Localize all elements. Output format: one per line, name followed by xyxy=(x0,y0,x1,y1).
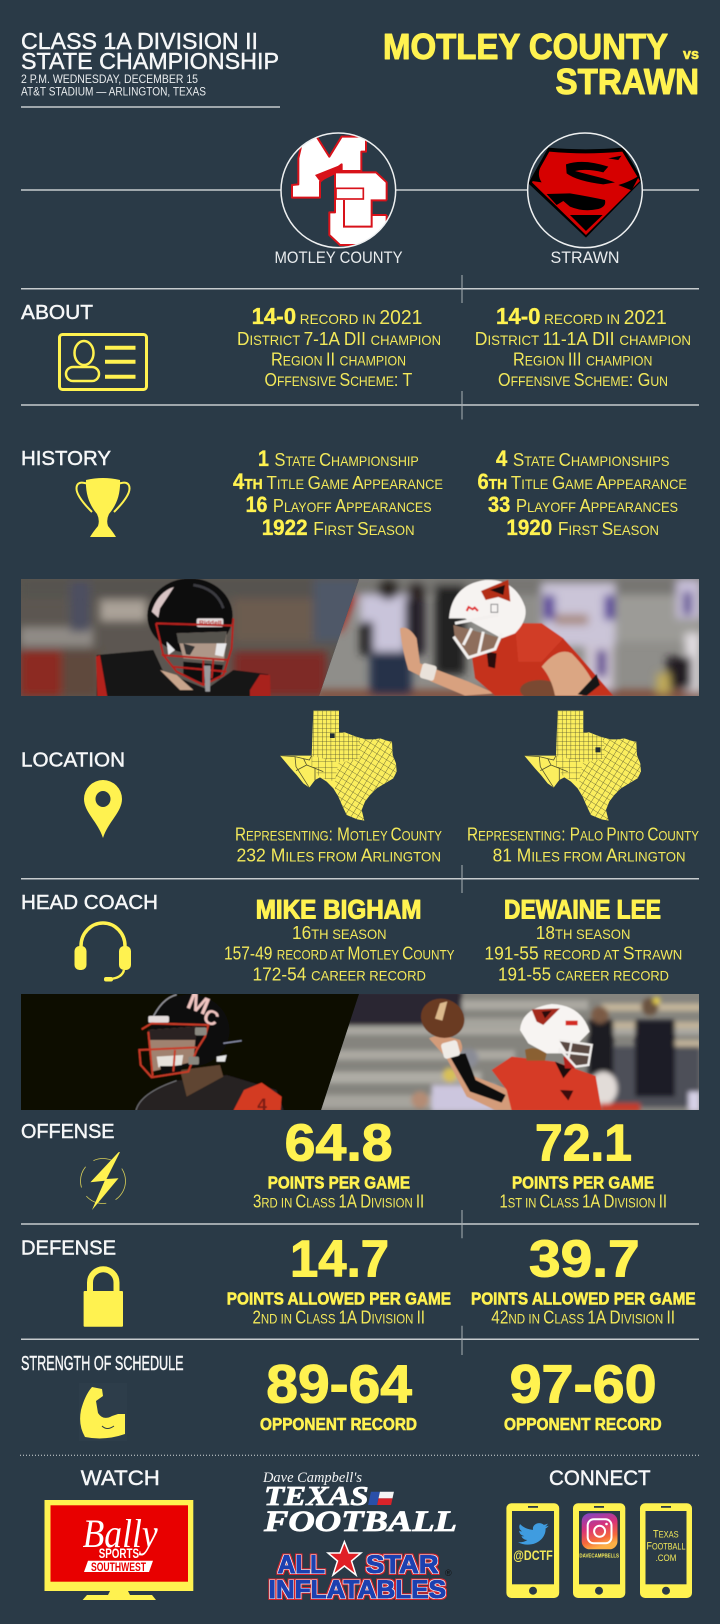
coach: Mike Bigham: 172-54 CAREER RECORD xyxy=(252,963,426,984)
logo: Dave Campbell's Texas Football xyxy=(262,1470,457,1538)
about: Motley County: OFFENSIVE SCHEME: T xyxy=(264,369,412,390)
stat: Motley County defense: 14.7 xyxy=(290,1231,389,1289)
location: Strawn: 81 MILES FROM ARLINGTON xyxy=(493,845,686,866)
stat: Strawn offense: 1ST IN CLASS 1A DIVISION II xyxy=(500,1191,667,1212)
logo: Strawn Superman shield xyxy=(528,133,643,248)
icon: headset xyxy=(74,923,131,982)
section: about xyxy=(21,302,691,390)
stat: Motley County defense: POINTS ALLOWED PER GAME xyxy=(227,1289,451,1309)
logo: Dave Campbell's Texas Football: TEXAS xyxy=(264,1481,369,1511)
icon: television with Bally Sports logo: SPORTS xyxy=(99,1546,139,1561)
coach: Dewaine Lee: 18TH SEASON xyxy=(536,922,630,943)
stat: Strawn offense xyxy=(500,1115,667,1212)
team label: Strawn: STRAWN xyxy=(550,248,620,267)
header: matchup title: STRAWN xyxy=(556,61,699,102)
about: Motley County xyxy=(237,303,441,390)
stat: Motley County defense: 2ND IN CLASS 1A DIVISION II xyxy=(252,1307,425,1328)
stat: Strawn defense: POINTS ALLOWED PER GAME xyxy=(471,1289,696,1309)
heading: defense: DEFENSE xyxy=(21,1237,116,1259)
icon: map pin xyxy=(84,780,122,838)
team label: Motley County: MOTLEY COUNTY xyxy=(274,248,402,267)
logo: Dave Campbell's Texas Football: Dave Campbell's xyxy=(262,1470,362,1486)
header: game details: 2 P.M. WEDNESDAY, DECEMBER 15 xyxy=(21,74,198,86)
stat: Motley County offense: 3RD IN CLASS 1A DIVISION II xyxy=(253,1191,424,1212)
photo banner 2: both players: M xyxy=(183,988,213,1021)
coach: Mike Bigham: 16TH SEASON xyxy=(292,922,387,943)
heading: location: LOCATION xyxy=(21,750,125,772)
location: Strawn: REPRESENTING: PALO PINTO COUNTY xyxy=(467,824,700,845)
logo: All Star Inflatables: ® xyxy=(445,1568,452,1578)
coach: Dewaine Lee: DEWAINE LEE xyxy=(504,894,661,924)
header: matchup title: vs xyxy=(683,47,699,63)
phone: Instagram xyxy=(573,1503,625,1598)
phone: Twitter: @DCTF xyxy=(513,1547,553,1563)
header: matchup title xyxy=(383,26,699,102)
about: Strawn: REGION III CHAMPION xyxy=(513,349,652,370)
header: matchup title: MOTLEY COUNTY xyxy=(383,26,668,67)
icon: lightning bolt xyxy=(80,1152,126,1210)
stat: Strawn defense xyxy=(471,1231,696,1328)
stat: Motley County opponent record: 89-64 xyxy=(266,1354,412,1414)
section: location xyxy=(21,710,700,866)
stat: Motley County offense: 64.8 xyxy=(285,1115,393,1173)
stat: Motley County opponent record: OPPONENT RECORD xyxy=(260,1414,417,1434)
stat: Strawn defense: 42ND IN CLASS 1A DIVISION II xyxy=(491,1307,675,1328)
location: Strawn xyxy=(467,824,700,866)
location: Motley County: REPRESENTING: MOTLEY COUNTY xyxy=(235,824,443,845)
heading: head coach: HEAD COACH xyxy=(21,892,158,914)
history: Motley County: 1 STATE CHAMPIONSHIP xyxy=(258,446,419,471)
header: game details: AT&T STADIUM — ARLINGTON, TEXAS xyxy=(21,86,206,98)
heading: history: HISTORY xyxy=(21,448,111,470)
icon: trophy xyxy=(76,478,130,537)
coach: Dewaine Lee xyxy=(484,894,682,984)
stat: Strawn opponent record: OPPONENT RECORD xyxy=(504,1414,662,1434)
phone: TexasFootball.com: FOOTBALL xyxy=(646,1540,686,1552)
photo banner 2: both players xyxy=(21,994,699,1110)
map: Texas with Motley County marked xyxy=(280,710,400,823)
stat: Strawn opponent record xyxy=(504,1354,662,1434)
history: Strawn: 33 PLAYOFF APPEARANCES xyxy=(488,492,678,517)
logo: All Star Inflatables: INFLATABLES xyxy=(269,1576,446,1604)
phone: Instagram: DAVECAMPBELLS xyxy=(579,1553,619,1559)
coach: Mike Bigham xyxy=(224,894,455,984)
about: Strawn: 14-0 RECORD IN 2021 xyxy=(496,303,667,329)
stat: Strawn offense: 72.1 xyxy=(535,1115,632,1173)
photo banner 1: both players: Riddell xyxy=(199,621,222,627)
section: connect xyxy=(506,1467,692,1598)
stat: Motley County defense xyxy=(227,1231,451,1328)
icon: Texas flag xyxy=(368,1492,394,1505)
location: Motley County xyxy=(235,824,443,866)
history: Motley County: 4TH TITLE GAME APPEARANCE xyxy=(233,469,443,494)
icon: television with Bally Sports logo: SOUTHWEST xyxy=(91,1562,146,1574)
phone: TexasFootball.com: .COM xyxy=(656,1553,676,1563)
about: Motley County: REGION II CHAMPION xyxy=(271,349,406,370)
icon: padlock xyxy=(84,1269,123,1327)
history: Strawn: 4 STATE CHAMPIONSHIPS xyxy=(496,446,669,471)
heading: strength of schedule: STRENGTH OF SCHEDULE xyxy=(21,1353,184,1375)
coach: Dewaine Lee: 191-55 RECORD AT STRAWN xyxy=(484,942,682,963)
location: Motley County: 232 MILES FROM ARLINGTON xyxy=(236,845,441,866)
coach: Dewaine Lee: 191-55 CAREER RECORD xyxy=(498,963,669,984)
section: head coach xyxy=(21,892,682,984)
header: game details: CLASS 1A DIVISION II xyxy=(21,28,258,54)
stat: Strawn defense: 39.7 xyxy=(529,1231,640,1289)
heading: offense: OFFENSE xyxy=(21,1121,114,1143)
icon: television with Bally Sports logo xyxy=(44,1500,193,1600)
icon: flexed arm xyxy=(79,1383,127,1441)
phone: TexasFootball.com: TEXAS xyxy=(653,1529,679,1541)
logo: All Star Inflatables xyxy=(269,1542,452,1604)
history: Motley County: 1922 FIRST SEASON xyxy=(262,515,415,540)
section: history xyxy=(21,446,687,540)
coach: Mike Bigham: MIKE BIGHAM xyxy=(256,894,422,924)
heading: about: ABOUT xyxy=(21,302,93,324)
logo: Dave Campbell's Texas Football: FOOTBALL xyxy=(263,1505,457,1538)
logo: All Star Inflatables: STAR xyxy=(366,1551,438,1579)
section: strength of schedule xyxy=(21,1353,662,1441)
logo: All Star Inflatables: ALL xyxy=(278,1551,325,1579)
icon: television with Bally Sports logo: Bally xyxy=(83,1511,158,1556)
history: Strawn: 1920 FIRST SEASON xyxy=(506,515,659,540)
section: defense xyxy=(21,1231,696,1328)
stat: Strawn offense: POINTS PER GAME xyxy=(512,1173,654,1193)
phone: Twitter xyxy=(506,1503,559,1598)
header: game details: STATE CHAMPIONSHIP xyxy=(21,48,279,74)
about: Strawn: OFFENSIVE SCHEME: GUN xyxy=(498,369,668,390)
heading: connect: CONNECT xyxy=(549,1467,651,1490)
photo banner 1: both players xyxy=(20,575,702,702)
photo banner 2: both players: 4 xyxy=(257,1095,267,1115)
about: Motley County: DISTRICT 7-1A DII CHAMPION xyxy=(237,328,441,349)
about: Motley County: 14-0 RECORD IN 2021 xyxy=(252,303,422,329)
history: Strawn xyxy=(478,446,687,540)
header: game details xyxy=(21,28,279,98)
coach: Mike Bigham: 157-49 RECORD AT MOTLEY COUNTY xyxy=(224,942,455,963)
stat: Motley County opponent record xyxy=(260,1354,417,1434)
heading: watch: WATCH xyxy=(81,1467,160,1490)
map: Texas with Palo Pinto County marked xyxy=(524,710,644,823)
history: Motley County: 16 PLAYOFF APPEARANCES xyxy=(246,492,432,517)
section: offense xyxy=(21,1115,667,1212)
about: Strawn: DISTRICT 11-1A DII CHAMPION xyxy=(475,328,691,349)
icon: ID card xyxy=(60,334,146,390)
history: Strawn: 6TH TITLE GAME APPEARANCE xyxy=(478,469,687,494)
stat: Motley County offense: POINTS PER GAME xyxy=(268,1173,410,1193)
phone: TexasFootball.com xyxy=(640,1503,692,1598)
stat: Strawn opponent record: 97-60 xyxy=(510,1354,657,1414)
photo banner 2: both players: C xyxy=(200,1005,222,1031)
stat: Motley County offense xyxy=(253,1115,424,1212)
about: Strawn xyxy=(475,303,691,390)
logo: Motley County MC xyxy=(281,133,396,248)
history: Motley County xyxy=(233,446,443,540)
section: watch xyxy=(44,1467,193,1600)
